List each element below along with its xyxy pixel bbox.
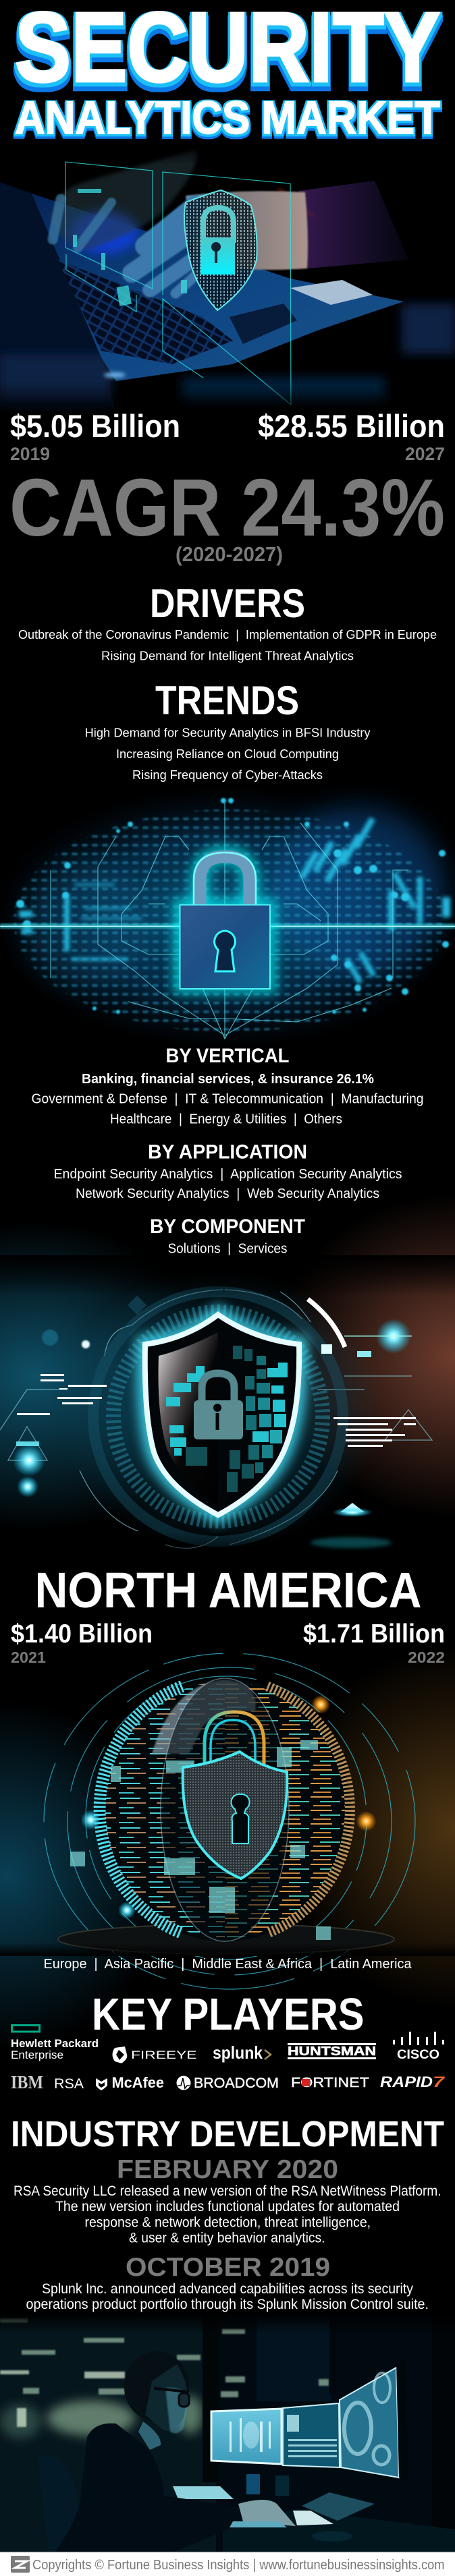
glows	[13, 1296, 412, 1517]
hud arcs	[0, 1290, 432, 1548]
by application: BY APPLICATION	[148, 1141, 307, 1163]
logo: Huntsman	[288, 2043, 376, 2059]
value 2022	[303, 1620, 445, 1666]
development: February 2020: The new version includes functional updates for automated	[55, 2198, 400, 2214]
cups	[246, 2474, 260, 2494]
value 2021: 2021	[11, 1649, 46, 1666]
development: October 2019: Splunk Inc. announced advanced capabilities across its security	[42, 2281, 413, 2297]
panel: analyst at monitors photo	[0, 2314, 455, 2552]
sleeve	[299, 181, 408, 268]
footer logo	[11, 2556, 30, 2573]
logo: Rapid7: 7	[433, 2073, 446, 2090]
logo: Fortinet: FORTINET	[291, 2076, 369, 2090]
logo: McAfee: McAfee	[112, 2074, 164, 2091]
panel: shield image	[0, 1194, 455, 1565]
trends	[85, 678, 371, 782]
development: February 2020: FEBRUARY 2020	[117, 2155, 338, 2184]
by component	[150, 1215, 305, 1256]
holographic panels	[65, 162, 291, 405]
panel: cyber padlock image	[0, 786, 455, 1049]
value 2022: 2022	[408, 1649, 445, 1666]
logo: Hewlett Packard Enterprise: Hewlett Packard	[11, 2037, 99, 2050]
glowing nodes	[16, 798, 449, 1014]
CAGR: (2020-2027)	[176, 542, 283, 566]
value 2021: $1.40 Billion	[11, 1620, 153, 1649]
logo: Huntsman: HUNTSMAN	[288, 2044, 376, 2058]
hud elements	[73, 189, 187, 306]
by vertical: Banking, financial services, & insurance 26.1%	[82, 1072, 374, 1087]
drivers: Rising Demand for Intelligent Threat Analytics	[101, 649, 354, 662]
development: February 2020: & user & entity behavior analytics.	[129, 2230, 325, 2246]
logo: Hewlett Packard Enterprise	[11, 2025, 99, 2061]
value 2021	[11, 1620, 153, 1666]
logo: Rapid7: RAPID	[380, 2073, 433, 2090]
by component: Solutions | Services	[167, 1241, 288, 1256]
padlock	[202, 1373, 234, 1402]
shield glow	[145, 1315, 299, 1515]
by application: Endpoint Security Analytics | Application Security Analytics	[54, 1167, 402, 1182]
key players heading: KEY PLAYERS	[92, 1989, 365, 2040]
trends: Rising Frequency of Cyber-Attacks	[132, 768, 323, 782]
globe	[99, 1678, 351, 1941]
market size 2027: 2027	[405, 444, 445, 464]
title	[15, 0, 440, 144]
ghost hand	[51, 150, 196, 250]
blurred lights	[0, 2396, 203, 2438]
value 2022: $1.71 Billion	[303, 1620, 445, 1649]
glow points	[81, 1695, 377, 1919]
padlock	[173, 853, 277, 994]
development: February 2020: response & network detection, threat intelligence,	[85, 2214, 371, 2230]
panel: globe padlock image	[0, 1646, 455, 2051]
desk	[223, 2509, 455, 2552]
drivers: Outbreak of the Coronavirus Pandemic | Implementation of GDPR in Europe	[18, 627, 437, 641]
data lines right	[333, 1417, 416, 1447]
monitors	[211, 2361, 408, 2482]
shield with lock	[184, 190, 257, 310]
by vertical: Government & Defense | IT & Telecommunication | Manufacturing	[31, 1091, 424, 1106]
market size 2019: 2019	[10, 444, 50, 464]
development: October 2019: OCTOBER 2019	[126, 2253, 330, 2282]
north america heading: NORTH AMERICA	[35, 1562, 421, 1618]
market size 2019	[10, 408, 180, 464]
circuit lines	[51, 803, 408, 1039]
keyboards	[293, 2511, 333, 2525]
drivers	[18, 581, 437, 662]
by application	[54, 1141, 402, 1201]
person	[38, 2351, 296, 2552]
white arc	[308, 1299, 345, 1347]
logo: Cisco: CISCO	[397, 2048, 439, 2062]
development: February 2020	[14, 2155, 441, 2246]
shield	[145, 1315, 299, 1515]
laptop deck	[32, 194, 404, 381]
footer	[0, 2552, 455, 2576]
by vertical: Healthcare | Energy & Utilities | Others	[110, 1112, 342, 1126]
data blocks	[166, 1346, 288, 1492]
by vertical: BY VERTICAL	[166, 1045, 289, 1067]
logo: IBM: IBM	[11, 2072, 43, 2092]
logo: Hewlett Packard Enterprise: Enterprise	[11, 2049, 63, 2061]
development: October 2019: operations product portfolio through its Splunk Mission Control suite.	[26, 2296, 429, 2312]
other regions: Europe | Asia Pacific | Middle East & Africa | Latin America	[43, 1957, 412, 1972]
development: October 2019	[26, 2253, 429, 2312]
by application: Network Security Analytics | Web Security Analytics	[76, 1186, 379, 1201]
by component: BY COMPONENT	[150, 1215, 305, 1238]
arm and fingers	[132, 191, 308, 293]
data lines left	[17, 1374, 107, 1415]
logo: FireEye: FIREEYE	[131, 2049, 197, 2061]
market size 2027	[258, 408, 445, 464]
logo: Broadcom: BROADCOM	[194, 2076, 279, 2091]
data boxes	[70, 1740, 331, 1940]
panel: hero laptop photo	[0, 138, 455, 418]
market size 2019: $5.05 Billion	[10, 408, 180, 444]
logo: splunk: splunk	[213, 2042, 263, 2063]
market size 2027: $28.55 Billion	[258, 408, 445, 444]
logo: Cisco	[393, 2032, 444, 2062]
platform	[58, 1924, 394, 1954]
lock shield	[183, 1712, 287, 1879]
logo: FireEye	[112, 2047, 197, 2063]
by vertical	[31, 1045, 424, 1126]
trends: High Demand for Security Analytics in BFSI Industry	[85, 726, 371, 739]
trends: TRENDS	[155, 678, 299, 723]
logo: RSA: RSA	[54, 2076, 84, 2092]
orbit rings	[44, 1653, 415, 1989]
trends: Increasing Reliance on Cloud Computing	[116, 747, 339, 761]
horizontal beam	[0, 923, 455, 929]
dark silhouettes	[203, 2314, 219, 2482]
drivers: DRIVERS	[150, 581, 305, 626]
rim dots	[100, 1686, 182, 1933]
